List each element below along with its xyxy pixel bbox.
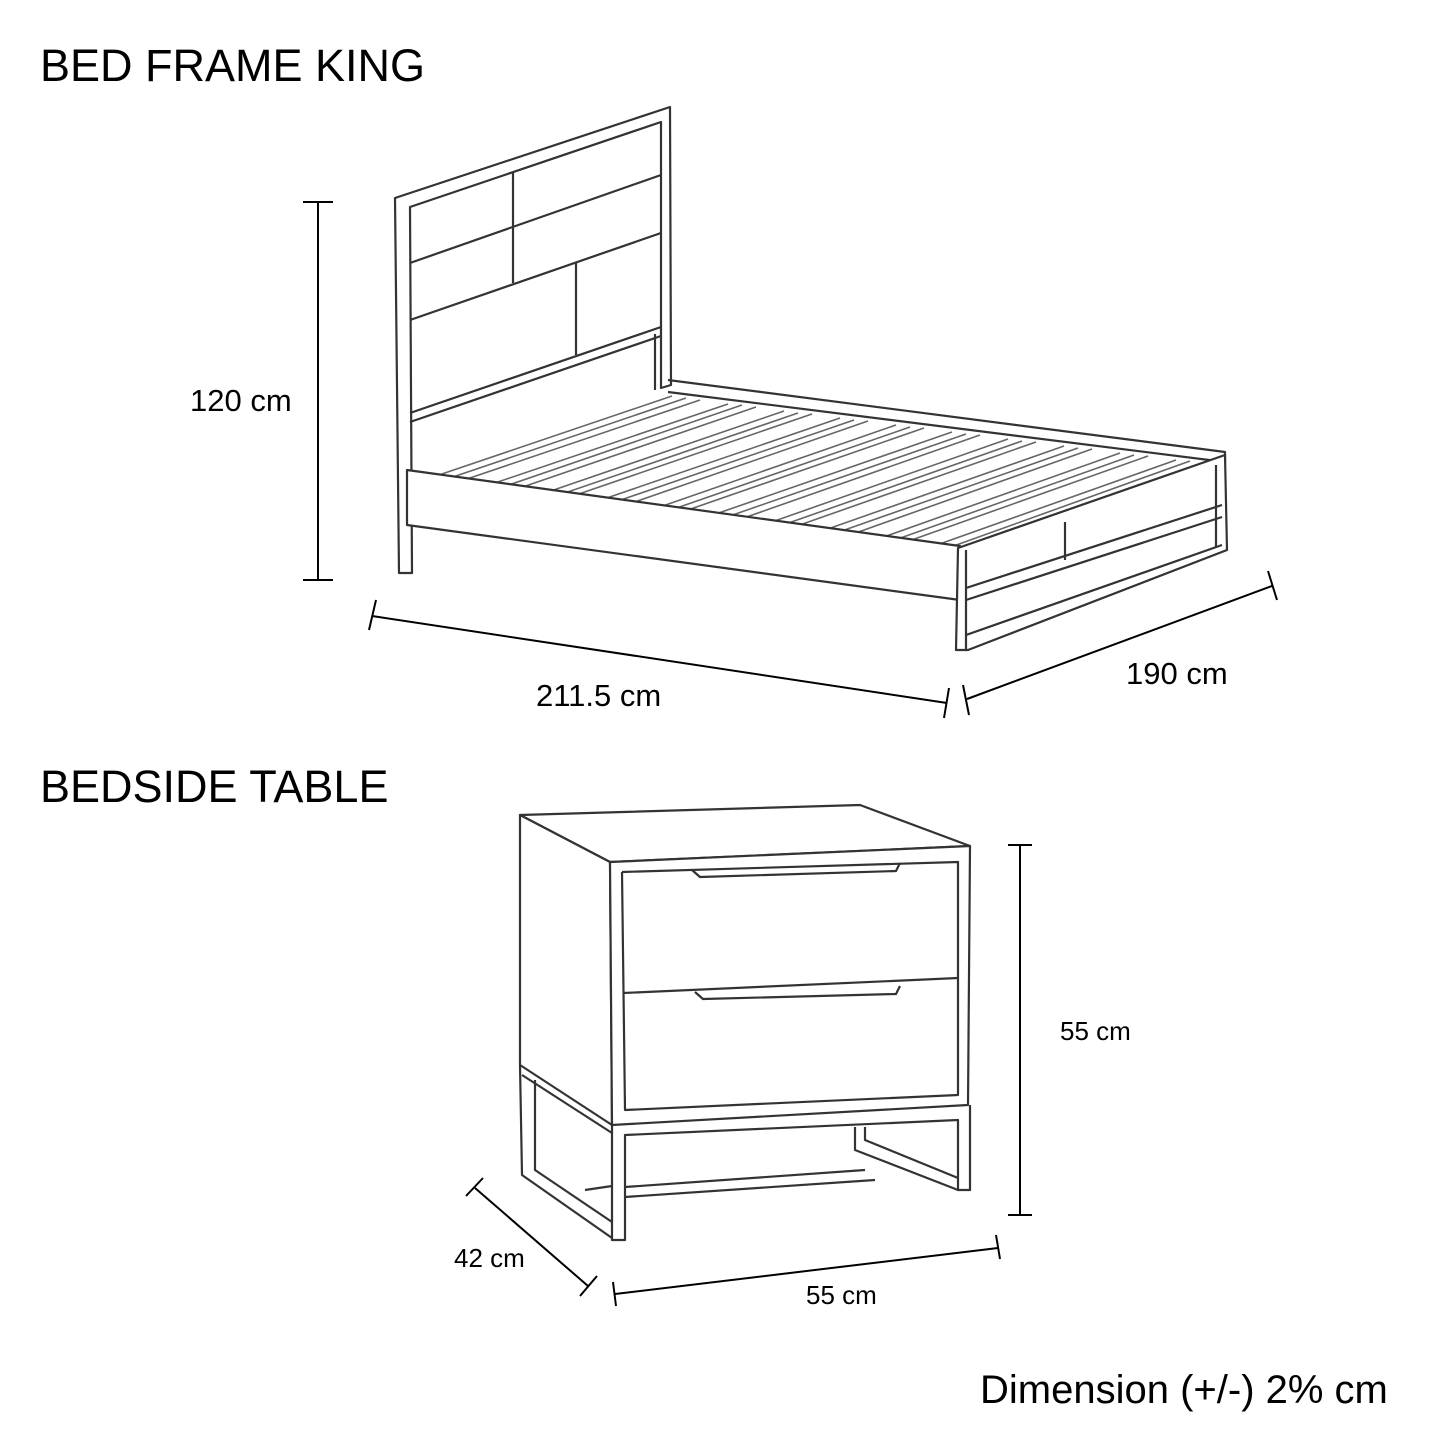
drawing: bed frame [395,107,1227,650]
footnote: dimension tolerance: Dimension (+/-) 2% cm [980,1368,1388,1412]
title: bed frame king: BED FRAME KING [40,40,425,91]
label: 120 cm: 120 cm [190,383,292,418]
label: 211.5 cm: 211.5 cm [536,678,661,713]
legs [612,1105,970,1240]
dimension lines: bed [303,202,1277,718]
slats [430,396,1190,548]
footboard [956,455,1227,650]
label: 55 cm width: 55 cm [806,1280,877,1310]
dimension lines: table [466,845,1032,1306]
label: 55 cm height: 55 cm [1060,1016,1131,1046]
headboard [395,107,671,573]
drawing: bedside table [520,805,970,1240]
label: 42 cm: 42 cm [454,1243,525,1273]
far side rail [668,380,1225,462]
label: 190 cm: 190 cm [1126,656,1228,691]
title: bedside table: BEDSIDE TABLE [40,761,388,812]
near side rail [407,470,960,600]
